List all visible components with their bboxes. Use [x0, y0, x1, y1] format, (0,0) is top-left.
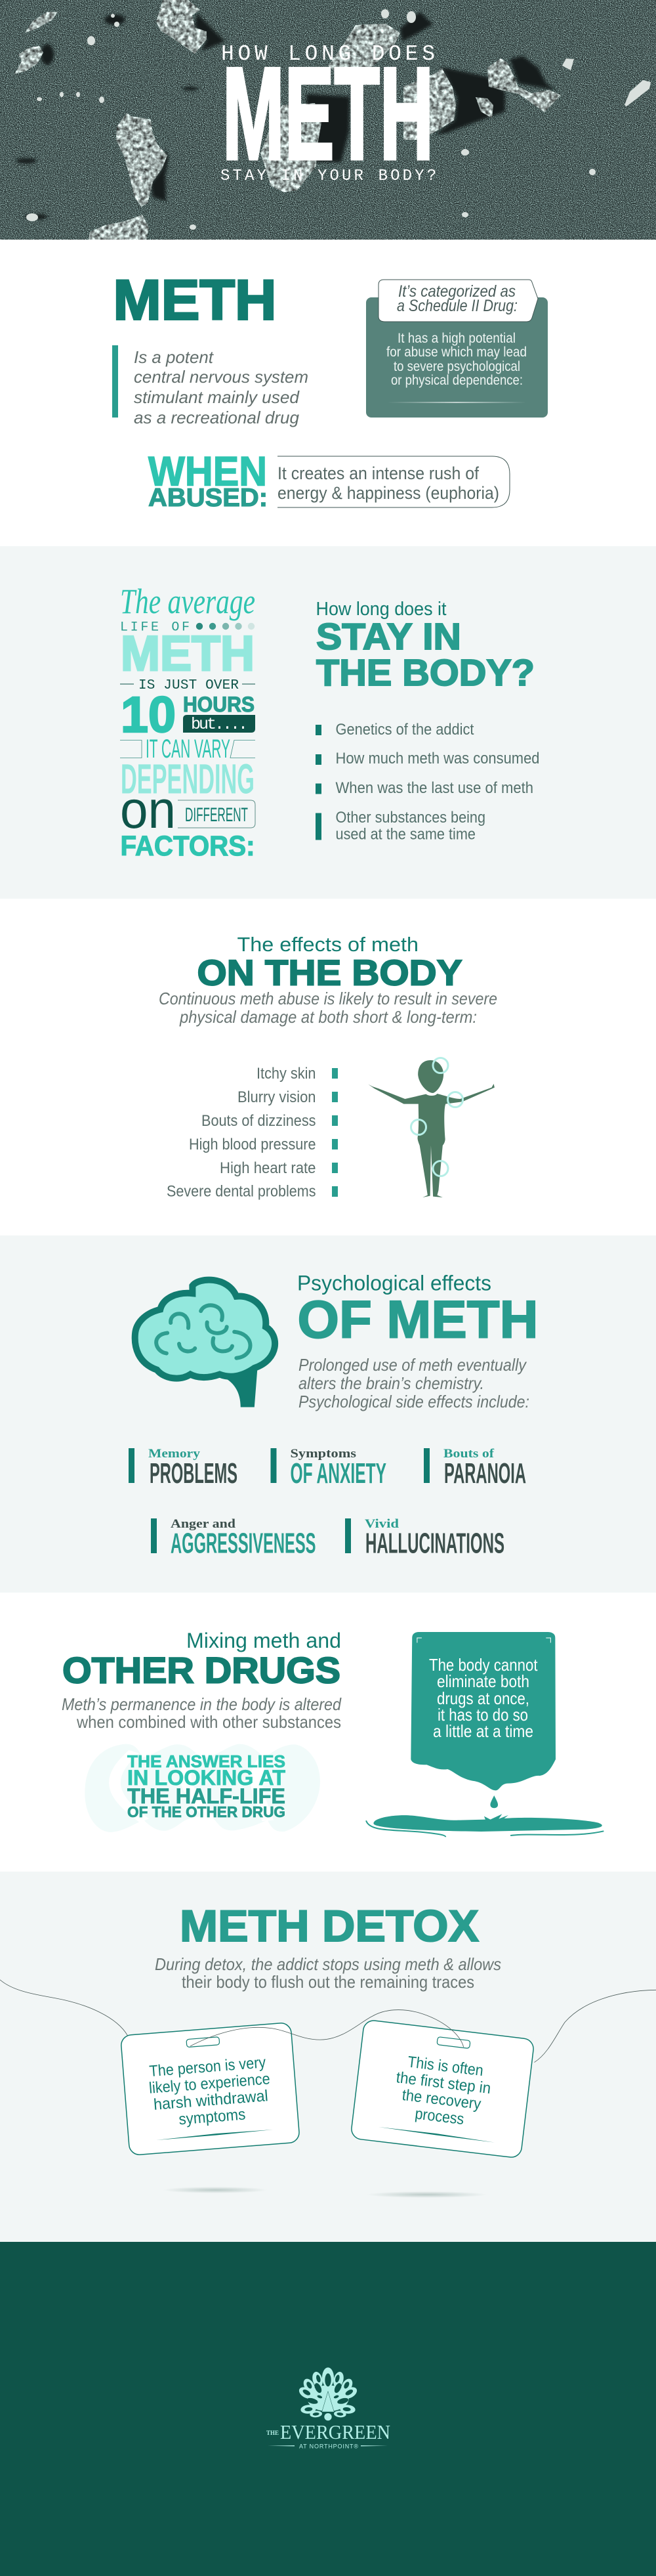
card: first step: the recovery [401, 2086, 482, 2113]
crystal shadows [16, 12, 556, 219]
wordmark: EVERGREEN [280, 2420, 390, 2443]
euphoria text: It creates an intense rush of [277, 463, 479, 483]
factor list: Other substances being [336, 809, 485, 826]
euphoria text [277, 463, 499, 503]
card: withdrawal [121, 2023, 300, 2155]
banner text [429, 1655, 538, 1741]
tab text: It’s categorized as [398, 282, 516, 301]
intro text [159, 989, 497, 1027]
the body: THE BODY? [316, 652, 535, 694]
card: first step: This is often [407, 2053, 484, 2080]
item: memory problems: Memory [148, 1447, 201, 1461]
card: withdrawal: symptoms [178, 2105, 246, 2128]
banner text: eliminate both [437, 1671, 529, 1691]
symptom list: Blurry vision [237, 1088, 316, 1106]
factor list: How much meth was consumed [336, 750, 539, 767]
sand background [0, 0, 656, 240]
on the body: ON THE BODY [197, 952, 462, 993]
abused: ABUSED: [148, 484, 268, 512]
is just over: IS JUST OVER [138, 678, 239, 693]
banner shape [411, 1632, 556, 1790]
card: withdrawal: The person is very [149, 2053, 266, 2080]
lead-in: How long does it [316, 599, 446, 620]
corner marks [417, 1638, 550, 1642]
callout text: THE ANSWER LIES [127, 1751, 285, 1771]
section: how long it stays [0, 546, 656, 899]
item: symptoms of anxiety: Symptoms [290, 1447, 356, 1461]
heading [62, 1629, 341, 1691]
definition text [134, 347, 308, 427]
meth large: METH [121, 626, 255, 681]
lead-in: Psychological effects [297, 1271, 491, 1295]
symptom list: High heart rate [220, 1159, 316, 1177]
section: what is meth [0, 240, 656, 546]
depending: DEPENDING [121, 755, 255, 802]
card body text [386, 331, 527, 388]
banner text: it has to do so [438, 1705, 528, 1725]
symptom list: Itchy skin [256, 1065, 316, 1083]
line: how long does: HOW LONG DOES [221, 42, 435, 66]
symptom list [167, 1065, 338, 1200]
intro text: physical damage at both short & long-term: [179, 1007, 477, 1027]
schedule II card [366, 280, 548, 418]
intro text [62, 1694, 342, 1732]
card: withdrawal: harsh withdrawal [153, 2087, 269, 2114]
section: mixing with other drugs [0, 1593, 656, 1872]
callout text [127, 1751, 285, 1820]
callout text: IN LOOKING AT [127, 1766, 285, 1790]
heading [197, 933, 462, 993]
callout text: OF THE OTHER DRUG [127, 1803, 285, 1820]
intro text: Continuous meth abuse is likely to result in severe [159, 989, 497, 1008]
section: meth detox [0, 1872, 656, 2242]
banner text: drugs at once, [437, 1688, 529, 1708]
lead-in: Mixing meth and [186, 1629, 341, 1652]
item: vivid hallucinations: HALLUCINATIONS [365, 1527, 504, 1560]
typographic column [120, 582, 255, 862]
card body text: to severe psychological [394, 359, 520, 374]
item: anger and aggressiveness: Anger and [171, 1517, 236, 1531]
tab text: a Schedule II Drug: [397, 297, 518, 315]
card: first step: process [414, 2105, 465, 2128]
item: bouts of paranoia: PARANOIA [444, 1457, 526, 1490]
accent bar [112, 345, 118, 418]
wordmark [266, 2420, 390, 2450]
wordmark: AT NORTHPOINT® [299, 2443, 358, 2450]
icon: human figure [368, 1058, 495, 1197]
intro text: when combined with other substances [76, 1712, 341, 1732]
on: on [120, 781, 176, 840]
line: meth: METH [222, 41, 434, 187]
definition text: central nervous system [134, 367, 308, 387]
pale blob [85, 1744, 320, 1832]
factor list: When was the last use of meth [336, 779, 533, 797]
footer [0, 2242, 656, 2576]
intro text: During detox, the addict stops using meth & allows [155, 1954, 501, 1974]
outline box [277, 456, 510, 507]
card shadows [163, 2187, 487, 2198]
when: WHEN [148, 449, 267, 495]
other drugs: OTHER DRUGS [62, 1649, 340, 1691]
icon: evergreen logo [297, 2367, 359, 2420]
10: 10 [121, 687, 176, 743]
star dots [196, 623, 255, 630]
the average: The average [120, 582, 255, 621]
line: stay in your body: STAY IN YOUR BODY? [220, 167, 436, 185]
heading [297, 1271, 538, 1350]
item: memory problems [129, 1447, 237, 1490]
intro text: Meth’s permanence in the body is altered [62, 1694, 342, 1714]
item: symptoms of anxiety: OF ANXIETY [290, 1457, 386, 1490]
drop [490, 1795, 498, 1808]
hanging wire [0, 1980, 656, 2063]
heading: meth detox: METH DETOX [180, 1901, 479, 1951]
card: withdrawal: likely to experience [148, 2070, 271, 2097]
factor list [316, 721, 539, 843]
factor list: Genetics of the addict [336, 721, 474, 739]
card body text: It has a high potential [398, 331, 516, 346]
intro text: Prolonged use of meth eventually [298, 1355, 527, 1375]
factor list: used at the same time [336, 826, 476, 843]
hours: HOURS [183, 693, 255, 716]
item: vivid hallucinations [345, 1517, 504, 1560]
dripping banner [366, 1632, 604, 1837]
definition text: as a recreational drug [134, 408, 300, 427]
callout: half-life [85, 1744, 320, 1832]
section: effects on the body [0, 899, 656, 1235]
factors: FACTORS: [121, 830, 255, 862]
symptom list: Severe dental problems [167, 1183, 316, 1200]
heading: meth: METH [113, 269, 277, 332]
icon: brain [135, 1280, 275, 1407]
symptom list: High blood pressure [189, 1136, 316, 1153]
crystals [14, 0, 561, 240]
banner text: a little at a time [433, 1721, 533, 1741]
different box: DIFFERENT [185, 804, 248, 826]
item: anger and aggressiveness [151, 1517, 316, 1560]
intro text [155, 1954, 501, 1992]
stay in: STAY IN [316, 616, 461, 658]
it can vary [120, 735, 255, 763]
symptom list: Bouts of dizziness [201, 1112, 316, 1130]
pebbles [26, 9, 651, 230]
section: psychological effects [0, 1235, 656, 1593]
of meth: OF METH [298, 1291, 538, 1350]
item: bouts of paranoia [424, 1447, 526, 1490]
but box: but.... [191, 715, 248, 734]
intro text [298, 1355, 529, 1411]
tab text [397, 282, 518, 315]
definition text: stimulant mainly used [134, 387, 300, 407]
definition text: Is a potent [134, 347, 215, 367]
card: first step [350, 2019, 535, 2158]
item: anger and aggressiveness: AGGRESSIVENESS [171, 1527, 316, 1560]
card tab [379, 280, 538, 322]
ripples [366, 1820, 604, 1837]
item: bouts of paranoia: Bouts of [443, 1447, 495, 1461]
item: vivid hallucinations: Vivid [365, 1517, 400, 1531]
intro text: alters the brain’s chemistry. [298, 1373, 484, 1393]
card body text: for abuse which may lead [386, 345, 527, 360]
card body text: or physical dependence: [391, 373, 523, 388]
intro text: their body to flush out the remaining traces [182, 1972, 474, 1992]
different box [178, 800, 255, 828]
lead-in: The effects of meth [237, 933, 419, 956]
life of: LIFE OF [120, 620, 190, 635]
banner text: The body cannot [429, 1655, 538, 1675]
hero title [220, 41, 436, 187]
puddle [373, 1814, 602, 1832]
wordmark: THE [266, 2430, 279, 2437]
it can vary: IT CAN VARY [146, 735, 230, 763]
euphoria text: energy & happiness (euphoria) [277, 483, 499, 503]
intro text: Psychological side effects include: [298, 1392, 529, 1411]
when abused [148, 449, 510, 512]
callout text: THE HALF-LIFE [127, 1784, 285, 1808]
heading: stay in the body [316, 599, 535, 694]
hero banner [0, 0, 656, 240]
card: first step: the first step in [395, 2069, 492, 2097]
item: symptoms of anxiety [270, 1447, 386, 1490]
item: memory problems: PROBLEMS [150, 1457, 237, 1490]
